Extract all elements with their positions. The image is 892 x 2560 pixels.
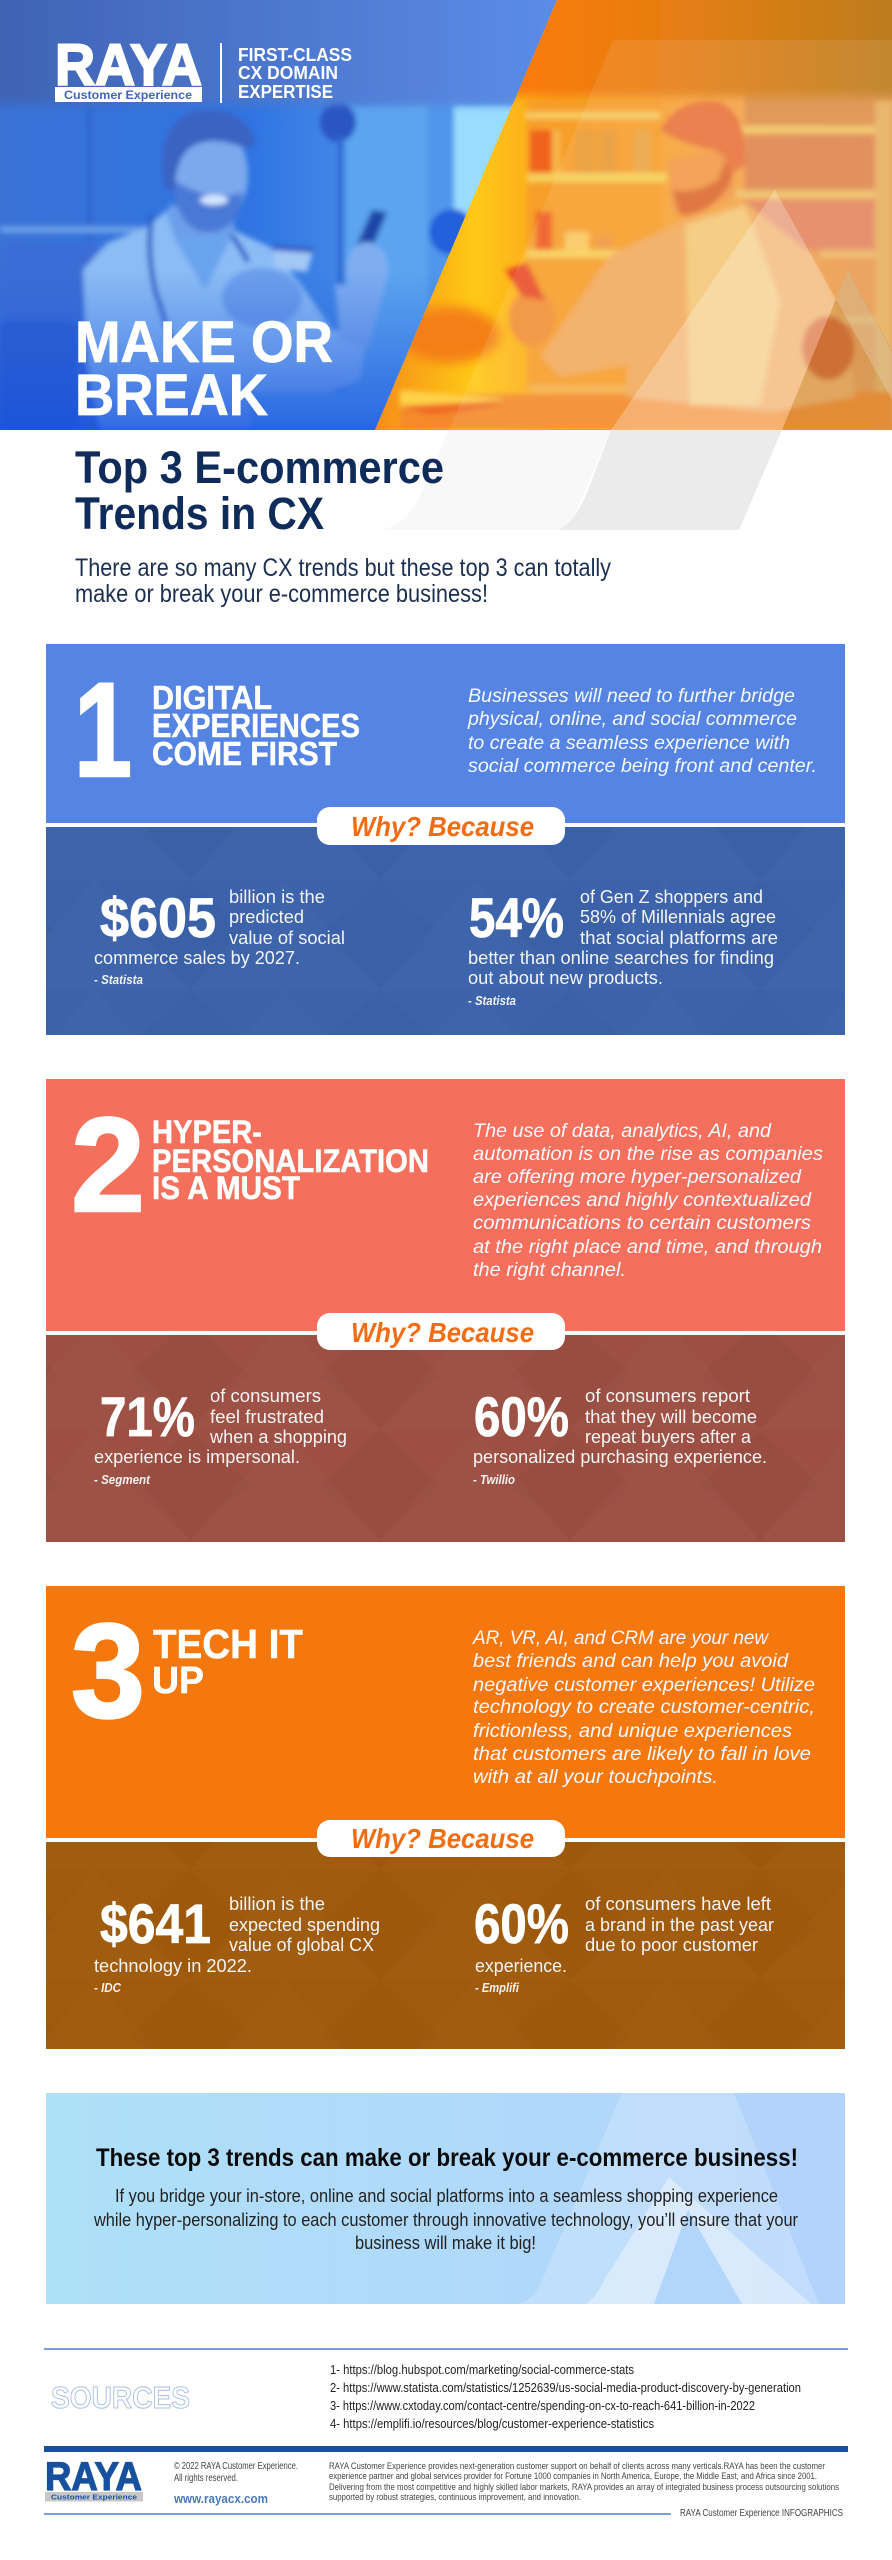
callout body — [93, 2185, 798, 2253]
stat: 60% repeat buyers: repeat buyers after a — [585, 1427, 752, 1447]
logo divider — [220, 43, 222, 103]
callout body: business will make it big! — [355, 2232, 536, 2253]
stat: 71% — [94, 1385, 347, 1487]
stat: 60% left a brand: experience. — [475, 1956, 567, 1976]
stat: 54%: better than online searches for finding — [468, 948, 774, 968]
stat: $605: $605 — [100, 886, 216, 949]
stat: 60% repeat buyers: - Twillio — [473, 1473, 515, 1487]
stat: $641 — [94, 1892, 380, 1995]
trend 3 description — [472, 1627, 815, 1788]
callout watermark A shape — [518, 2093, 819, 2304]
footer thick bar — [44, 2446, 848, 2452]
footer bottom rule — [44, 2513, 671, 2515]
sources heading: SOURCES — [51, 2380, 190, 2415]
hero photo banner — [0, 0, 892, 430]
panel 1 top background — [46, 644, 845, 823]
trend 2 description — [473, 1120, 823, 1281]
sources top rule — [44, 2348, 848, 2350]
stat: $641: billion is the — [229, 1894, 325, 1914]
heading: Top 3 E-commerce — [75, 442, 444, 493]
stat: 54%: that social platforms are — [580, 928, 778, 948]
stat: 60% left a brand: of consumers have left — [585, 1894, 771, 1914]
trend 1 description: Businesses will need to further bridge — [468, 685, 795, 707]
panel: trend 2 hyper-personalization — [46, 1079, 845, 1542]
logo: RAYA Customer Experience: Customer Experience — [64, 88, 192, 102]
tagline — [238, 45, 352, 102]
hero right: orange duotone photo of man with phone — [350, 0, 892, 430]
tagline: CX DOMAIN — [238, 63, 338, 83]
company description: supported by robust strategies, continuous improvement, and innovation. — [329, 2492, 581, 2502]
stat: $641: technology in 2022. — [94, 1956, 252, 1976]
sources list: 4- https://emplifi.io/resources/blog/customer-experience-statistics — [330, 2416, 654, 2431]
stat: $605: commerce sales by 2027. — [94, 948, 300, 968]
stat: $605: - Statista — [94, 973, 143, 987]
trend 2 description: communications to certain customers — [473, 1212, 811, 1234]
stat: 54%: 54% — [469, 886, 564, 949]
stat: $641: value of global CX — [229, 1935, 374, 1955]
why because pill — [317, 1820, 565, 1857]
trend 3 description: best friends and can help you avoid — [473, 1650, 789, 1672]
heading — [75, 442, 444, 539]
footer infographics label: RAYA Customer Experience INFOGRAPHICS — [680, 2508, 843, 2519]
why because pill — [317, 807, 565, 845]
trend 3 title — [152, 1621, 303, 1702]
panel 1 bottom background — [46, 827, 845, 1035]
stat: $641: $641 — [100, 1892, 211, 1955]
stat: 60% left a brand: due to poor customer — [585, 1935, 758, 1955]
why because pill: Why? Because — [351, 1823, 534, 1854]
company description: RAYA Customer Experience provides next-generation customer support on behalf of clients across many verticals.RAYA has been the customer — [329, 2461, 825, 2471]
trend 2 description: are offering more hyper-personalized — [473, 1166, 802, 1188]
stat: 60% repeat buyers: personalized purchasing experience. — [473, 1447, 767, 1467]
stat: 60% repeat buyers: 60% — [474, 1385, 569, 1448]
panel: trend 3 tech it up — [46, 1586, 845, 2049]
stat: $605: predicted — [229, 907, 304, 927]
callout background — [46, 2093, 845, 2304]
stat: 60% left a brand: 60% — [474, 1892, 569, 1955]
panel 3 bottom background — [46, 1842, 845, 2049]
callout body: If you bridge your in-store, online and social platforms into a seamless shopping experience — [115, 2185, 778, 2206]
hero title — [75, 310, 333, 428]
stat: 60% left a brand: - Emplifi — [475, 1981, 519, 1995]
trend 1 description — [467, 685, 817, 777]
trend 1 title — [152, 679, 360, 772]
trend 3 title: TECH IT — [153, 1621, 303, 1667]
company description — [329, 2461, 839, 2502]
trend 1 title: COME FIRST — [152, 735, 337, 772]
why because pill — [317, 1313, 565, 1350]
heading: Trends in CX — [75, 488, 324, 539]
footer logo: Customer Experience — [51, 2492, 137, 2502]
stat: 54%: of Gen Z shoppers and — [580, 887, 763, 907]
footer logo: RAYA — [45, 2455, 142, 2499]
intro text — [75, 554, 611, 608]
stat: 71%: - Segment — [94, 1473, 151, 1487]
intro text: There are so many CX trends but these top 3 can totally — [75, 554, 611, 582]
trend 1 title: DIGITAL — [152, 679, 272, 716]
logo: RAYA Customer Experience: RAYA — [55, 33, 202, 98]
copyright: © 2022 RAYA Customer Experience. — [174, 2461, 298, 2472]
trend 3 description: technology to create customer-centric, — [473, 1696, 815, 1718]
stat: $605 — [94, 886, 345, 987]
sources list — [330, 2362, 801, 2431]
trend 3 description: frictionless, and unique experiences — [473, 1720, 792, 1742]
stat: 60% repeat buyers — [473, 1385, 767, 1487]
trend 3 description: with at all your touchpoints. — [473, 1766, 718, 1788]
stat: 71%: when a shopping — [209, 1427, 347, 1447]
stat: 71%: experience is impersonal. — [94, 1447, 300, 1467]
number 3: 3 — [71, 1597, 145, 1746]
copyright — [174, 2461, 298, 2484]
number 2: 2 — [71, 1091, 145, 1240]
panel 3 top background — [46, 1586, 845, 1838]
tagline: EXPERTISE — [238, 82, 333, 102]
sources list: 1- https://blog.hubspot.com/marketing/social-commerce-stats — [330, 2362, 634, 2377]
intro text: make or break your e-commerce business! — [75, 580, 488, 608]
stat: $605: billion is the — [229, 887, 325, 907]
hero title: MAKE OR — [75, 310, 333, 375]
hero white swoosh overlays — [449, 40, 892, 430]
why because pill: Why? Because — [351, 811, 534, 842]
panel 2 bottom background — [46, 1335, 845, 1542]
sources list: 2- https://www.statista.com/statistics/1252639/us-social-media-product-discovery-by-generation — [330, 2380, 801, 2395]
stat: 60% repeat buyers: of consumers report — [585, 1386, 750, 1406]
trend 1 description: physical, online, and social commerce — [467, 708, 797, 730]
website link: www.rayacx.com — [173, 2491, 268, 2506]
trend 3 title: UP — [152, 1660, 204, 1702]
trend 1 description: to create a seamless experience with — [468, 732, 790, 754]
stat: 60% repeat buyers: that they will become — [585, 1407, 757, 1427]
why because pill: Why? Because — [351, 1317, 534, 1348]
trend 3 description: AR, VR, AI, and CRM are your new — [472, 1627, 770, 1649]
trend 1 description: social commerce being front and center. — [468, 755, 817, 777]
trend 2 title: PERSONALIZATION — [152, 1143, 429, 1179]
sources list: 3- https://www.cxtoday.com/contact-centre/spending-on-cx-to-reach-641-billion-in-2022 — [330, 2398, 755, 2413]
stat: 60% left a brand: a brand in the past year — [585, 1915, 774, 1935]
trend 2 description: experiences and highly contextualized — [473, 1189, 812, 1211]
stat: 54%: out about new products. — [468, 968, 663, 988]
stat: 71%: feel frustrated — [210, 1407, 324, 1427]
stat: 71%: of consumers — [210, 1386, 321, 1406]
callout body: while hyper-personalizing to each customer through innovative technology, you’ll ensure that your — [93, 2209, 798, 2230]
trend 2 title: HYPER- — [152, 1114, 262, 1150]
stat: $641: - IDC — [94, 1981, 122, 1995]
stat: 54%: 58% of Millennials agree — [580, 907, 776, 927]
trend 2 description: at the right place and time, and through — [473, 1236, 822, 1258]
tagline: FIRST-CLASS — [238, 45, 352, 65]
swoosh continuing below hero — [381, 430, 782, 530]
trend 2 description: the right channel. — [473, 1259, 626, 1281]
panel: trend 1 digital experiences — [46, 644, 845, 1035]
stat: 54% — [468, 886, 778, 1008]
panel 2 top background — [46, 1079, 845, 1331]
callout title: These top 3 trends can make or break your e-commerce business! — [96, 2144, 798, 2172]
number 1: 1 — [74, 656, 132, 805]
trend 2 description: The use of data, analytics, AI, and — [473, 1120, 772, 1142]
hero title: BREAK — [75, 363, 268, 428]
trend 2 title: IS A MUST — [152, 1170, 300, 1206]
trend 3 description: negative customer experiences! Utilize — [473, 1674, 815, 1696]
trend 2 description: automation is on the rise as companies — [473, 1143, 823, 1165]
stat: $641: expected spending — [229, 1915, 380, 1935]
panel: conclusion callout — [46, 2093, 845, 2304]
stat: 71%: 71% — [100, 1385, 195, 1448]
company description: experience partner and global services provider for Fortune 1000 companies in North America, Europe, the Middle East, and Africa since 2001. — [329, 2471, 817, 2481]
stat: $605: value of social — [229, 928, 345, 948]
stat: 54%: - Statista — [468, 994, 516, 1008]
stat: 60% left a brand — [474, 1892, 774, 1995]
copyright: All rights reserved. — [174, 2473, 238, 2484]
trend 3 description: that customers are likely to fall in love — [473, 1743, 811, 1765]
hero left: blue duotone photo of smiling man — [0, 0, 590, 430]
trend 2 title — [152, 1114, 429, 1206]
trend 1 title: EXPERIENCES — [152, 707, 360, 744]
